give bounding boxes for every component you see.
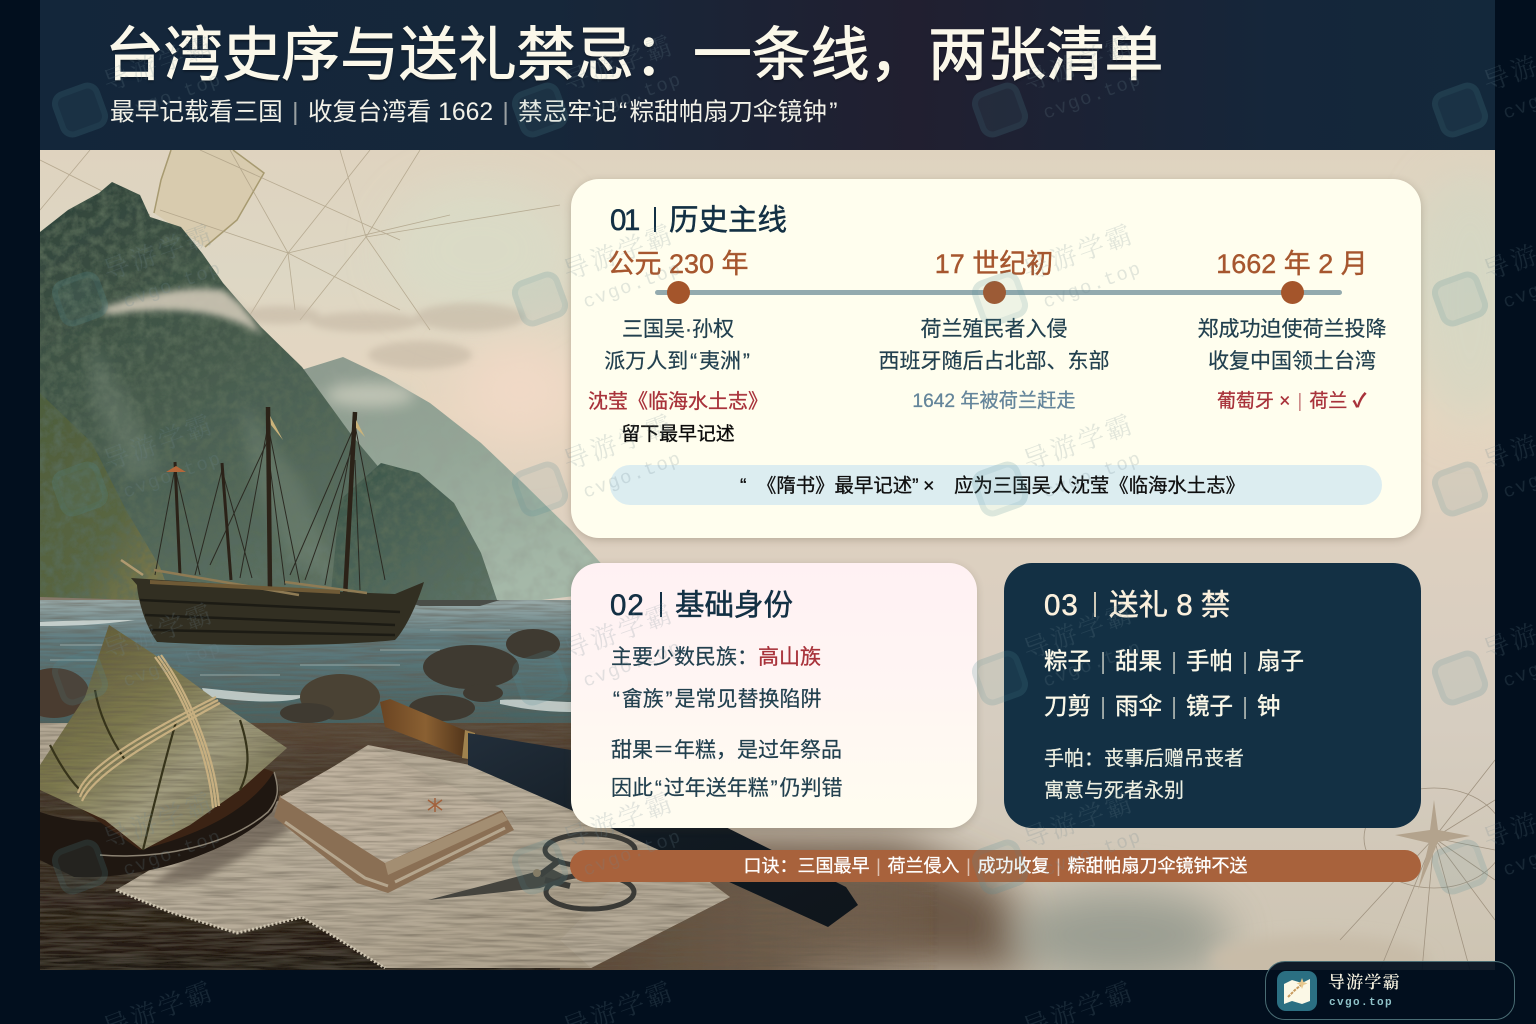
panel: 02 basic identity [571,563,977,828]
year: 1662: 1662 年 2 月 [1216,249,1368,279]
header band [40,0,1495,150]
subtitle: 最早记载看三国 收复台湾看 1662 禁忌牢记“粽甜帕扇刀伞镜钟” [110,99,837,126]
icon: map [1277,971,1317,1011]
note: Portugal vs Netherlands: | [1297,391,1302,412]
year: 17th century: 17 世纪初 [935,249,1053,279]
wood lower right [560,835,1030,970]
watermark layer: 导游学霸 [557,25,679,99]
watermark layer: 导游学霸 [97,404,219,478]
watermark layer: cvgo.top [1040,826,1145,882]
event: recovery: 收复中国领土台湾 [1208,350,1376,373]
subtitle: | [502,99,509,126]
text: She trap: “畲族”是常见替换陷阱 [613,688,822,711]
watermark layer: cvgo.top [580,69,685,125]
callout: correction: ” [912,475,919,497]
ship [121,407,424,645]
list: taboos row 2: | [1242,693,1248,719]
watermark layer: cvgo.top [580,637,685,693]
watermark layer: 导游学霸 [97,25,219,99]
event: Koxinga: 郑成功迫使荷兰投降 [1198,318,1386,341]
watermark layer: cvgo.top [1040,448,1145,504]
sea rocks [19,629,560,723]
sea [40,600,571,723]
banner: mnemonic: 口诀：三国最早 荷兰侵入 成功收复 粽甜帕扇刀伞镜钟不送 [744,856,1248,876]
watermark layer: 导游学霸 [1017,25,1139,99]
heading: history main line: 历史主线 [669,204,787,237]
note: Portugal vs Netherlands: 葡萄牙 × 荷兰 ✓ [1217,391,1366,412]
linen cloth [40,723,730,968]
callout: correction: × [923,475,934,497]
watermark layer: 导游学霸 [1017,782,1139,856]
watermark layer: 导游学霸 [557,782,679,856]
watermark layer: 导游学霸 [1017,593,1139,667]
dot: 230 [667,281,690,304]
text: ethnic group: 主要少数民族：高山族 [611,646,821,669]
timeline [655,290,1342,295]
parchment sky [40,150,1495,970]
map island [154,150,264,247]
note: earliest record: 留下最早记述 [621,424,735,445]
brand url: cvgo.top [1329,997,1393,1009]
event: Wu expedition line 2: 派万人到“夷洲” [604,350,750,373]
dot: 1662 [1281,281,1304,304]
heading: 02: 02 [610,589,645,622]
handkerchief [274,747,514,893]
watermark layer: cvgo.top [120,258,225,314]
callout: correction: “ [740,475,746,497]
callout: correction [610,465,1382,505]
event: Spanish occupation: 西班牙随后占北部、东部 [878,350,1110,373]
text: wrong judgement: 因此“过年送年糕”仍判错 [611,777,842,800]
list: taboos row 2: 刀剪 雨伞 镜子 钟 [1044,693,1280,719]
list: taboos row 2: | [1171,693,1177,719]
note: Shen Ying: 沈莹《临海水土志》 [588,391,768,413]
list: taboos row 1: | [1100,648,1106,674]
year: 230: 公元 230 年 [607,249,749,279]
watermark layer: cvgo.top [1040,637,1145,693]
rice dumpling [40,625,287,850]
watermark layer: 导游学霸 [557,593,679,667]
mist [105,289,262,335]
umbrella [380,699,858,927]
watermark layer: cvgo.top [120,69,225,125]
panel: 03 gift taboos [1004,563,1421,828]
panel: 01 history timeline [571,179,1421,538]
badge: brand logo [1265,961,1515,1020]
distant mountain [304,357,600,600]
clouds [240,303,525,369]
note: handkerchief: 手帕：丧事后赠吊丧者 [1044,748,1244,770]
watermark layer: 导游学霸 [97,593,219,667]
shoreline [40,597,135,600]
dot: 17th century [983,281,1006,304]
plate [40,760,278,877]
title: 台湾史序与送礼禁忌：一条线，两张清单 [105,23,1163,88]
banner: mnemonic: | [1056,856,1061,876]
watermark layer: cvgo.top [1040,258,1145,314]
watermark layer: cvgo.top [120,448,225,504]
list: taboos row 1: 粽子 甜果 手帕 扇子 [1044,648,1304,674]
watermark layer: cvgo.top [580,448,685,504]
cloth right fringe over umbrella end [568,890,730,968]
note: meaning: 寓意与死者永别 [1044,780,1184,802]
callout: correction: 《隋书》最早记述 应为三国吴人沈莹《临海水土志》 [757,475,1245,497]
rhumb lines [40,150,560,330]
text: sweet fruit: 甜果＝年糕，是过年祭品 [611,739,842,762]
heading: basic identity: 基础身份 [675,589,793,622]
watermark layer: cvgo.top [580,826,685,882]
subtitle: | [292,99,299,126]
list: taboos row 1: | [1242,648,1248,674]
compass rose [1340,760,1504,970]
list: taboos row 2: | [1100,693,1106,719]
watermark layer: cvgo.top [1040,69,1145,125]
brand name: 导游学霸 [1328,968,1401,993]
foreground left ridge [40,393,172,605]
watermark layer: 导游学霸 [97,214,219,288]
watermark layer: 导游学霸 [1017,214,1139,288]
main mountain [40,182,378,590]
watermark layer: 导游学霸 [557,404,679,478]
scissors [428,834,635,909]
watermark layer: 导游学霸 [1017,404,1139,478]
wooden table [40,723,600,970]
event: Wu expedition: 三国吴·孙权 [622,318,734,341]
watermark layer: 导游学霸 [97,782,219,856]
banner: mnemonic: | [876,856,881,876]
heading: 03: 03 [1044,589,1079,622]
banner: mnemonic [570,850,1421,882]
list: taboos row 1: | [1171,648,1177,674]
heading: 01: 01 [610,204,638,237]
foothill [330,463,497,602]
banner: mnemonic: | [966,856,971,876]
watermark layer: cvgo.top [120,637,225,693]
event: Dutch invasion: 荷兰殖民者入侵 [920,318,1068,341]
watermark layer: 导游学霸 [557,214,679,288]
heading: eight taboos: 送礼 8 禁 [1109,589,1230,622]
note: 1642: 1642 年被荷兰赶走 [912,391,1076,412]
watermark layer: cvgo.top [580,258,685,314]
watermark layer: cvgo.top [120,826,225,882]
